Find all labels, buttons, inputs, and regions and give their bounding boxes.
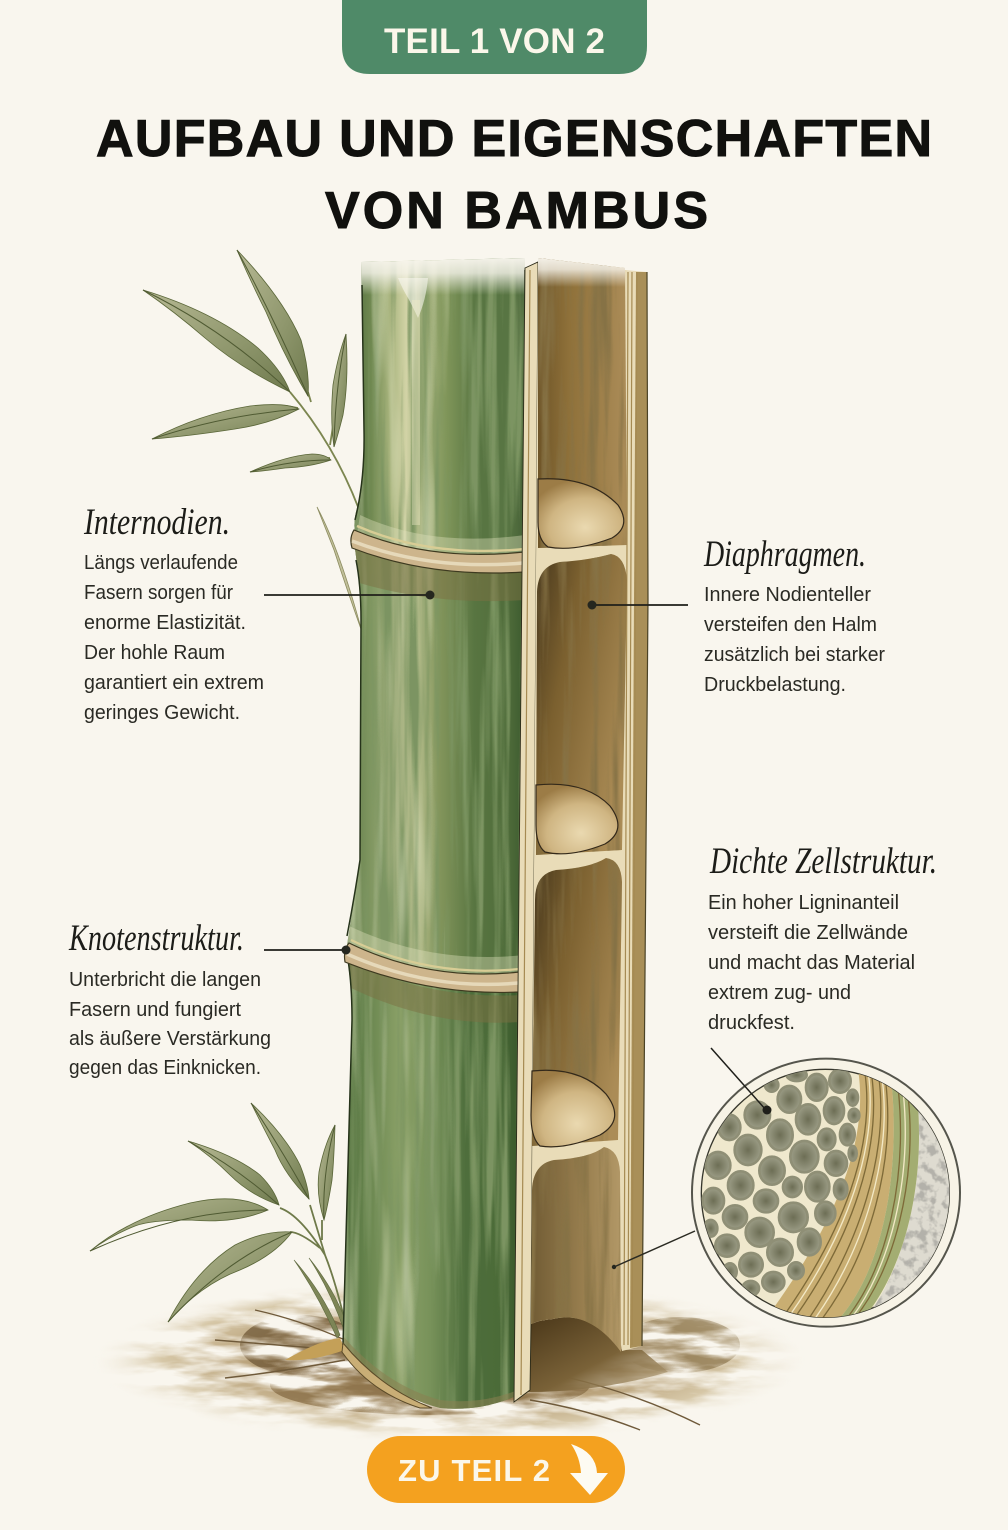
leader: diaphragms bbox=[588, 600, 688, 610]
outer parenchyma texture bbox=[874, 1110, 950, 1308]
cut section: walls and inner chambers bbox=[514, 255, 648, 1402]
internode segment 1 bbox=[354, 258, 525, 554]
leaf bbox=[188, 1141, 279, 1205]
title bbox=[96, 110, 932, 240]
upper chamber bbox=[535, 255, 630, 550]
internodes label: Fasern sorgen für bbox=[84, 582, 233, 604]
node ring 2 bbox=[344, 940, 519, 992]
diaphragms label bbox=[703, 534, 885, 696]
leader: node structure bbox=[264, 946, 350, 954]
dense cell structure label: und macht das Material bbox=[708, 952, 915, 974]
leaf bbox=[318, 1125, 335, 1220]
dense cell structure label: Ein hoher Ligninanteil bbox=[708, 892, 899, 914]
leaf bbox=[143, 290, 290, 392]
title: AUFBAU UND EIGENSCHAFTEN bbox=[96, 110, 932, 168]
internodes label: garantiert ein extrem bbox=[84, 672, 264, 694]
diaphragms label: Innere Nodienteller bbox=[704, 584, 871, 606]
internodes label bbox=[83, 502, 264, 724]
node structure label: Fasern und fungiert bbox=[69, 999, 241, 1021]
node ring 1 bbox=[351, 526, 525, 573]
dense cell structure label: druckfest. bbox=[708, 1012, 795, 1034]
node structure label: Knotenstruktur. bbox=[68, 918, 244, 959]
leaf bbox=[168, 1232, 292, 1322]
internode segment 3 bbox=[340, 945, 520, 1415]
diaphragms label: Diaphragmen. bbox=[703, 534, 866, 575]
chamber 2 bbox=[536, 554, 627, 855]
leaf bbox=[237, 250, 308, 396]
dense cell structure label: versteift die Zellwände bbox=[708, 922, 908, 944]
bottom button: to part 2: ZU TEIL 2 bbox=[398, 1453, 550, 1488]
magnified cell structure circle bbox=[692, 1059, 960, 1327]
internodes label: Internodien. bbox=[83, 502, 230, 543]
bottom chamber bbox=[528, 1145, 624, 1355]
top badge: part 1 of 2: TEIL 1 VON 2 bbox=[384, 22, 605, 61]
bamboo culm: outer green face bbox=[340, 255, 526, 1415]
soil ground illustration bbox=[90, 1276, 810, 1444]
leader: cell structure bbox=[711, 1048, 772, 1114]
ground blades bbox=[294, 1258, 347, 1338]
node structure label: als äußere Verstärkung bbox=[69, 1028, 271, 1050]
node structure label: Unterbricht die langen bbox=[69, 969, 261, 991]
node structure label: gegen das Einknicken. bbox=[69, 1057, 261, 1079]
dense cell structure label: Dichte Zellstruktur. bbox=[709, 841, 937, 882]
diaphragm disc 1 bbox=[538, 479, 624, 548]
chamber 3 bbox=[530, 855, 625, 1150]
left cut wall bbox=[514, 262, 538, 1402]
title: VON BAMBUS bbox=[325, 182, 708, 240]
dense cell structure label bbox=[708, 841, 937, 1034]
node structure label bbox=[68, 918, 271, 1079]
leaf bbox=[332, 334, 347, 447]
upper bamboo branch with leaves bbox=[143, 250, 362, 632]
webs and right wall bbox=[531, 262, 648, 1351]
leader: internodes bbox=[264, 590, 434, 600]
top badge: part 1 of 2 bbox=[342, 0, 647, 74]
internodes label: enorme Elastizität. bbox=[84, 612, 246, 634]
bottom button: to part 2 bbox=[367, 1436, 625, 1503]
diaphragms label: Druckbelastung. bbox=[704, 674, 846, 696]
diaphragms label: zusätzlich bei starker bbox=[704, 644, 885, 666]
internodes label: Längs verlaufende bbox=[84, 552, 238, 574]
lower bamboo shoot with leaves bbox=[90, 1103, 347, 1338]
cells bbox=[703, 1069, 859, 1296]
internodes label: Der hohle Raum bbox=[84, 642, 225, 664]
internodes label: geringes Gewicht. bbox=[84, 702, 240, 724]
pale thin leaf bbox=[317, 507, 362, 632]
internode segment 2 bbox=[347, 550, 522, 974]
leaf bbox=[251, 1103, 309, 1199]
diaphragms label: versteifen den Halm bbox=[704, 614, 877, 636]
diaphragm disc 2 bbox=[536, 784, 618, 854]
leaf bbox=[152, 405, 299, 439]
leader: wall to magnifier bbox=[612, 1231, 695, 1269]
diaphragm disc 3 bbox=[531, 1070, 615, 1147]
icon: curved down arrow bbox=[570, 1444, 608, 1495]
dense cell structure label: extrem zug- und bbox=[708, 982, 851, 1004]
fibre band bbox=[773, 1072, 894, 1323]
leaf bbox=[90, 1199, 268, 1251]
base collar bbox=[342, 1343, 432, 1408]
leaf bbox=[250, 454, 331, 472]
